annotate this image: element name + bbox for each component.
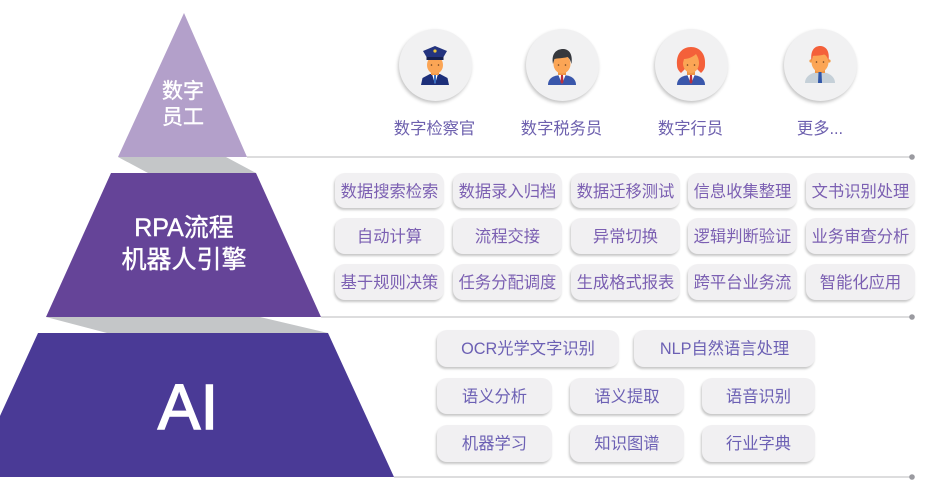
chip	[806, 264, 915, 300]
label: 数字检察官: 数字检察官	[394, 120, 475, 138]
chip	[570, 378, 684, 414]
chip	[437, 378, 552, 414]
label: 数字税务员: 数字税务员	[521, 120, 602, 138]
chip	[702, 425, 815, 462]
chip: 数据搜索检索	[341, 182, 438, 200]
chip: 自动计算	[357, 228, 422, 246]
chip: 数据录入归档	[459, 182, 556, 200]
pyramid label: RPA流程机器人引擎	[121, 214, 246, 274]
icon: bank clerk	[655, 29, 728, 101]
pyramid label: RPA流程机器人引擎: 机器人引擎	[121, 246, 246, 274]
chip: 智能化应用	[820, 274, 901, 292]
pyramid label: AI: AI	[158, 371, 218, 443]
chip	[634, 330, 815, 367]
pyramid label: 数字员工: 数字	[162, 80, 204, 103]
chip: 语义提取	[594, 388, 660, 406]
chip: 逻辑判断验证	[694, 228, 791, 246]
chip: 流程交接	[475, 228, 540, 246]
panel: RPA capabilities	[333, 173, 915, 303]
icon: tax officer	[526, 29, 599, 101]
chip	[453, 264, 562, 300]
chip: 生成格式报表	[577, 274, 674, 292]
chip: 语音识别	[726, 388, 791, 406]
panel: AI capabilities	[435, 330, 815, 465]
chip	[335, 218, 444, 254]
chip: OCR光学文字识别	[461, 340, 595, 358]
chip	[702, 378, 815, 414]
chip	[571, 218, 680, 254]
chip: 知识图谱	[594, 435, 660, 453]
chip	[688, 264, 797, 300]
icon: more staff	[784, 29, 856, 101]
chip	[688, 218, 797, 254]
chip	[453, 173, 562, 208]
chip: NLP自然语言处理	[660, 340, 789, 358]
label: 数字行员: 数字行员	[658, 120, 723, 138]
chip	[335, 173, 444, 208]
chip	[688, 173, 797, 208]
chip	[437, 425, 552, 462]
chip: 行业字典	[726, 435, 791, 453]
icon: officer	[398, 29, 472, 101]
chip	[571, 264, 680, 300]
chip: 基于规则决策	[341, 274, 438, 292]
chip: 跨平台业务流	[694, 274, 791, 292]
chip	[437, 330, 619, 367]
chip	[453, 218, 562, 254]
chip: 业务审查分析	[812, 228, 909, 246]
chip	[570, 425, 684, 462]
label: 更多: 更多...	[797, 120, 843, 138]
chip: 异常切换	[593, 228, 658, 246]
chip	[335, 264, 444, 300]
chip: 机器学习	[462, 435, 527, 453]
chip: 任务分配调度	[459, 274, 556, 292]
chip: 语义分析	[462, 388, 527, 406]
chip: 文书识别处理	[812, 182, 909, 200]
chip: 信息收集整理	[694, 182, 791, 200]
chip	[806, 173, 915, 208]
pyramid label: 数字员工: 员工	[162, 106, 204, 129]
chip: 数据迁移测试	[577, 182, 674, 200]
pyramid label: RPA流程机器人引擎: RPA流程	[134, 214, 234, 242]
chip	[806, 218, 915, 254]
pyramid label: 数字员工	[162, 80, 204, 129]
chip	[571, 173, 680, 208]
